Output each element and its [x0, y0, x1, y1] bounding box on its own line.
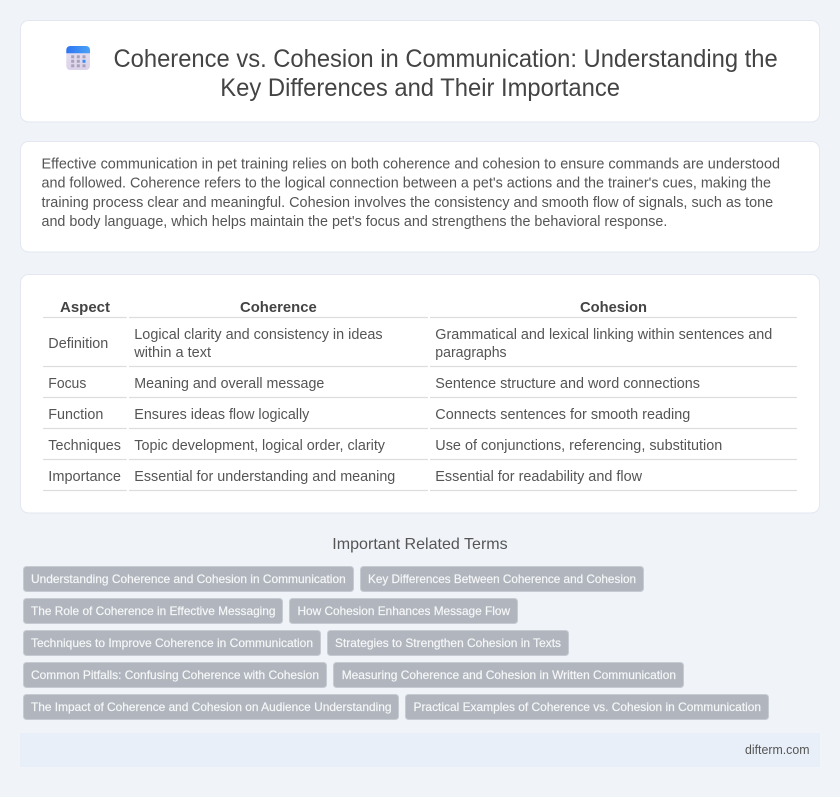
panel: related term chips: [24, 566, 768, 720]
table row: importance: Importance: [48, 469, 121, 485]
chip: [334, 662, 684, 688]
chip: Strategies to Strengthen Cohesion in Texts: [335, 636, 561, 650]
table row: focus: Meaning and overall message: [134, 376, 324, 392]
chip: [328, 630, 568, 656]
table row: techniques: Techniques: [48, 438, 121, 454]
chip: The Role of Coherence in Effective Messaging: [31, 604, 276, 618]
panel: comparison table: [20, 274, 820, 513]
chip: [360, 566, 644, 592]
intro paragraph: and body language, which helps maintain the pet's focus and strengthens the behavioral response.: [42, 214, 667, 230]
chip: [24, 694, 398, 720]
chip: [24, 662, 326, 688]
title: Coherence vs. Cohesion in Communication: Understanding the: [114, 45, 778, 73]
table row: techniques: [43, 438, 797, 460]
table row: definition: Grammatical and lexical linking within sentences and: [435, 327, 772, 343]
chip: Measuring Coherence and Cohesion in Written Communication: [342, 668, 676, 682]
table header row: Cohesion: [580, 299, 647, 316]
chip: Understanding Coherence and Cohesion in Communication: [31, 572, 346, 586]
chip: [290, 598, 518, 624]
title: Key Differences and Their Importance: [220, 74, 620, 102]
chip: [24, 598, 282, 624]
table row: importance: Essential for readability and flow: [435, 469, 643, 485]
table row: definition: within a text: [133, 345, 211, 361]
icon: calendar: [66, 46, 90, 70]
chip: Key Differences Between Coherence and Cohesion: [368, 572, 636, 586]
table header row: Aspect: [60, 299, 110, 316]
intro paragraph: and followed. Coherence refers to the logical connection between a pet's actions and the trainer's cues, making the: [42, 176, 771, 192]
table row: techniques: Topic development, logical order, clarity: [134, 438, 386, 454]
table row: definition: [43, 327, 797, 366]
intro paragraph: [42, 156, 780, 230]
chip: How Cohesion Enhances Message Flow: [298, 604, 510, 618]
footer bar: [20, 733, 820, 767]
table row: focus: Sentence structure and word connections: [435, 376, 700, 392]
table row: focus: [43, 376, 797, 398]
chip: The Impact of Coherence and Cohesion on Audience Understanding: [31, 700, 392, 714]
table row: definition: Logical clarity and consistency in ideas: [134, 327, 383, 343]
table row: focus: Focus: [48, 376, 86, 392]
title: [114, 45, 778, 102]
chip: Practical Examples of Coherence vs. Cohesion in Communication: [414, 700, 761, 714]
chip: Common Pitfalls: Confusing Coherence with Cohesion: [31, 668, 319, 682]
table row: function: Ensures ideas flow logically: [134, 407, 310, 423]
table row: importance: Essential for understanding and meaning: [134, 469, 395, 485]
intro paragraph: training process clear and meaningful. Cohesion involves the consistency and smooth flow of signals, such as tone: [42, 195, 773, 211]
table row: importance: [43, 469, 797, 490]
panel: title header: [20, 20, 820, 122]
chip: [24, 566, 354, 592]
heading: important related terms: Important Related Terms: [332, 536, 508, 553]
footer source text: difterm.com: [745, 742, 810, 757]
table row: definition: paragraphs: [435, 345, 507, 361]
table header row: [43, 299, 797, 318]
chip: [406, 694, 768, 720]
table header row: Coherence: [240, 299, 317, 316]
intro paragraph: Effective communication in pet training relies on both coherence and cohesion to ensure commands are understood: [42, 156, 780, 172]
table row: function: [43, 407, 797, 428]
table row: function: Connects sentences for smooth reading: [435, 407, 690, 423]
table row: function: Function: [48, 407, 103, 423]
table row: techniques: Use of conjunctions, referencing, substitution: [435, 438, 722, 454]
table row: definition: Definition: [48, 336, 108, 352]
chip: [24, 630, 320, 656]
panel: introduction: [20, 142, 820, 252]
chip: Techniques to Improve Coherence in Communication: [31, 636, 313, 650]
